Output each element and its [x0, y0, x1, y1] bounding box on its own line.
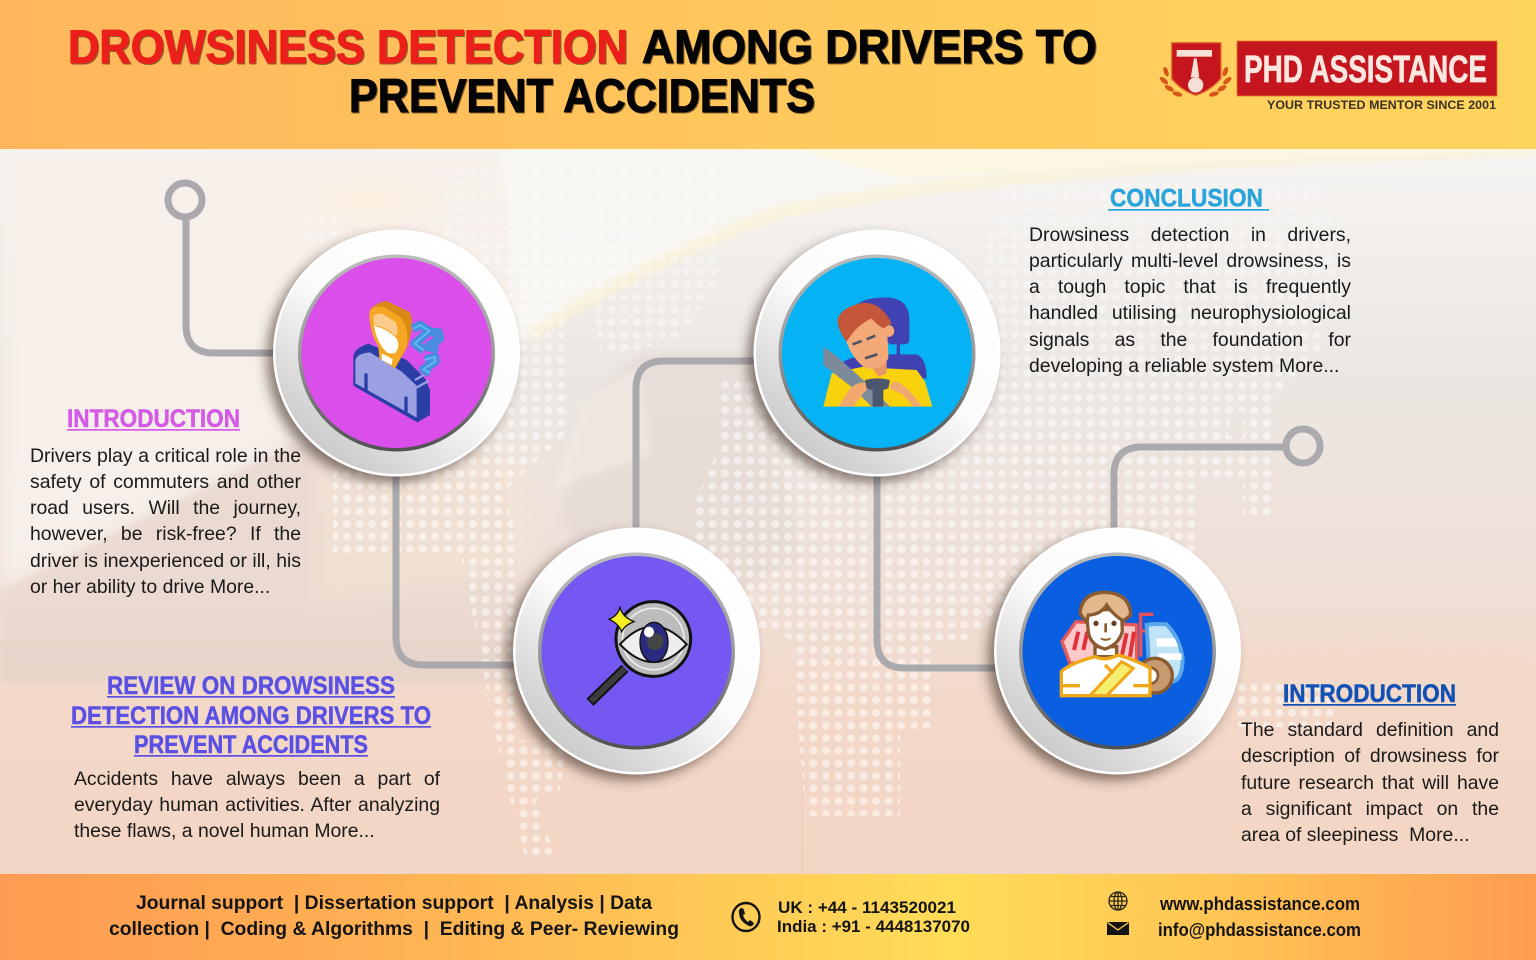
text: conclusion body: handled utilising neurophysiological — [1029, 302, 1351, 324]
phone numbers: UK : +44 - 1143520021 — [778, 898, 956, 917]
phone numbers: India : +91 - 4448137070 — [777, 917, 970, 936]
text: right introduction body: description of drowsiness for — [1241, 745, 1499, 767]
phone numbers — [777, 898, 970, 936]
title: AMONG DRIVERS TO — [642, 20, 1097, 73]
text: review body: everyday human activities. After analyzing — [74, 794, 440, 816]
text: right introduction body: a significant impact on the — [1241, 798, 1499, 820]
circle: drowsy driver — [748, 230, 1000, 482]
title: DROWSINESS DETECTION — [68, 20, 628, 73]
circle: driver with road signs — [988, 528, 1241, 780]
text: introduction body — [30, 444, 301, 598]
footer services text — [109, 892, 679, 940]
text: introduction body: however, be risk-free? If the — [30, 523, 301, 545]
icon: globe — [1109, 892, 1127, 910]
heading: review on drowsiness — [71, 672, 431, 759]
text: right introduction body: area of sleepiness More... — [1241, 824, 1470, 846]
text: introduction body: driver is inexperienced or ill, his — [30, 550, 301, 572]
text: introduction body: safety of commuters and other — [30, 471, 301, 493]
icon: sleepy person — [353, 301, 440, 422]
icon: crest with laurels — [1159, 43, 1233, 98]
heading: review on drowsiness: REVIEW ON DROWSINESS — [107, 672, 395, 700]
text: introduction body: or her ability to drive More... — [30, 576, 270, 598]
footer services text: Journal support | Dissertation support | Analysis | Data — [136, 892, 652, 914]
icon: phone — [732, 903, 760, 931]
circle: sleepy person — [267, 230, 520, 482]
logo: PhD Assistance — [1159, 41, 1497, 112]
icon: magnifier and eye — [590, 602, 691, 702]
heading: conclusion: CONCLUSION — [1110, 184, 1263, 212]
icon: driver with road signs — [1061, 592, 1183, 696]
text: conclusion body: a tough topic that is frequently — [1029, 276, 1351, 298]
icon: drowsy driver — [823, 298, 932, 407]
text: review body — [74, 768, 440, 842]
icon: envelope — [1107, 922, 1129, 935]
title — [68, 20, 1097, 122]
connector lines — [168, 183, 1320, 668]
website and email — [1158, 894, 1361, 940]
website and email: www.phdassistance.com — [1159, 894, 1360, 914]
heading: review on drowsiness: DETECTION AMONG DRIVERS TO — [71, 702, 431, 730]
footer services text: collection | Coding & Algorithms | Editing & Peer- Reviewing — [109, 918, 679, 940]
text: introduction body: Drivers play a critical role in the — [30, 444, 301, 466]
text: conclusion body: particularly multi-level drowsiness, is — [1029, 250, 1351, 272]
text: conclusion body — [1029, 224, 1351, 377]
text: right introduction body: future research that will have — [1241, 772, 1499, 794]
circle: eye under magnifier — [507, 528, 760, 780]
logo tagline: YOUR TRUSTED MENTOR SINCE 2001 — [1267, 98, 1496, 112]
text: review body: these flaws, a novel human More... — [74, 820, 375, 842]
world map dot pattern — [333, 233, 1334, 855]
text: conclusion body: developing a reliable system More... — [1029, 355, 1339, 377]
heading: introduction right: INTRODUCTION — [1283, 680, 1456, 708]
text: conclusion body: signals as the foundation for — [1029, 329, 1351, 351]
title: PREVENT ACCIDENTS — [349, 69, 815, 122]
footer band — [0, 874, 1536, 960]
heading: introduction: INTRODUCTION — [67, 405, 240, 433]
heading: review on drowsiness: PREVENT ACCIDENTS — [134, 731, 368, 759]
text: right introduction body: The standard definition and — [1241, 719, 1499, 741]
text: review body: Accidents have always been a part of — [74, 768, 440, 790]
website and email: info@phdassistance.com — [1158, 920, 1361, 940]
logo wordmark — [1237, 41, 1497, 96]
text: right introduction body — [1241, 719, 1499, 846]
header band — [0, 0, 1536, 149]
text: conclusion body: Drowsiness detection in drivers, — [1029, 224, 1351, 246]
background photo panel — [0, 149, 1536, 874]
text: introduction body: road users. Will the journey, — [30, 497, 301, 519]
